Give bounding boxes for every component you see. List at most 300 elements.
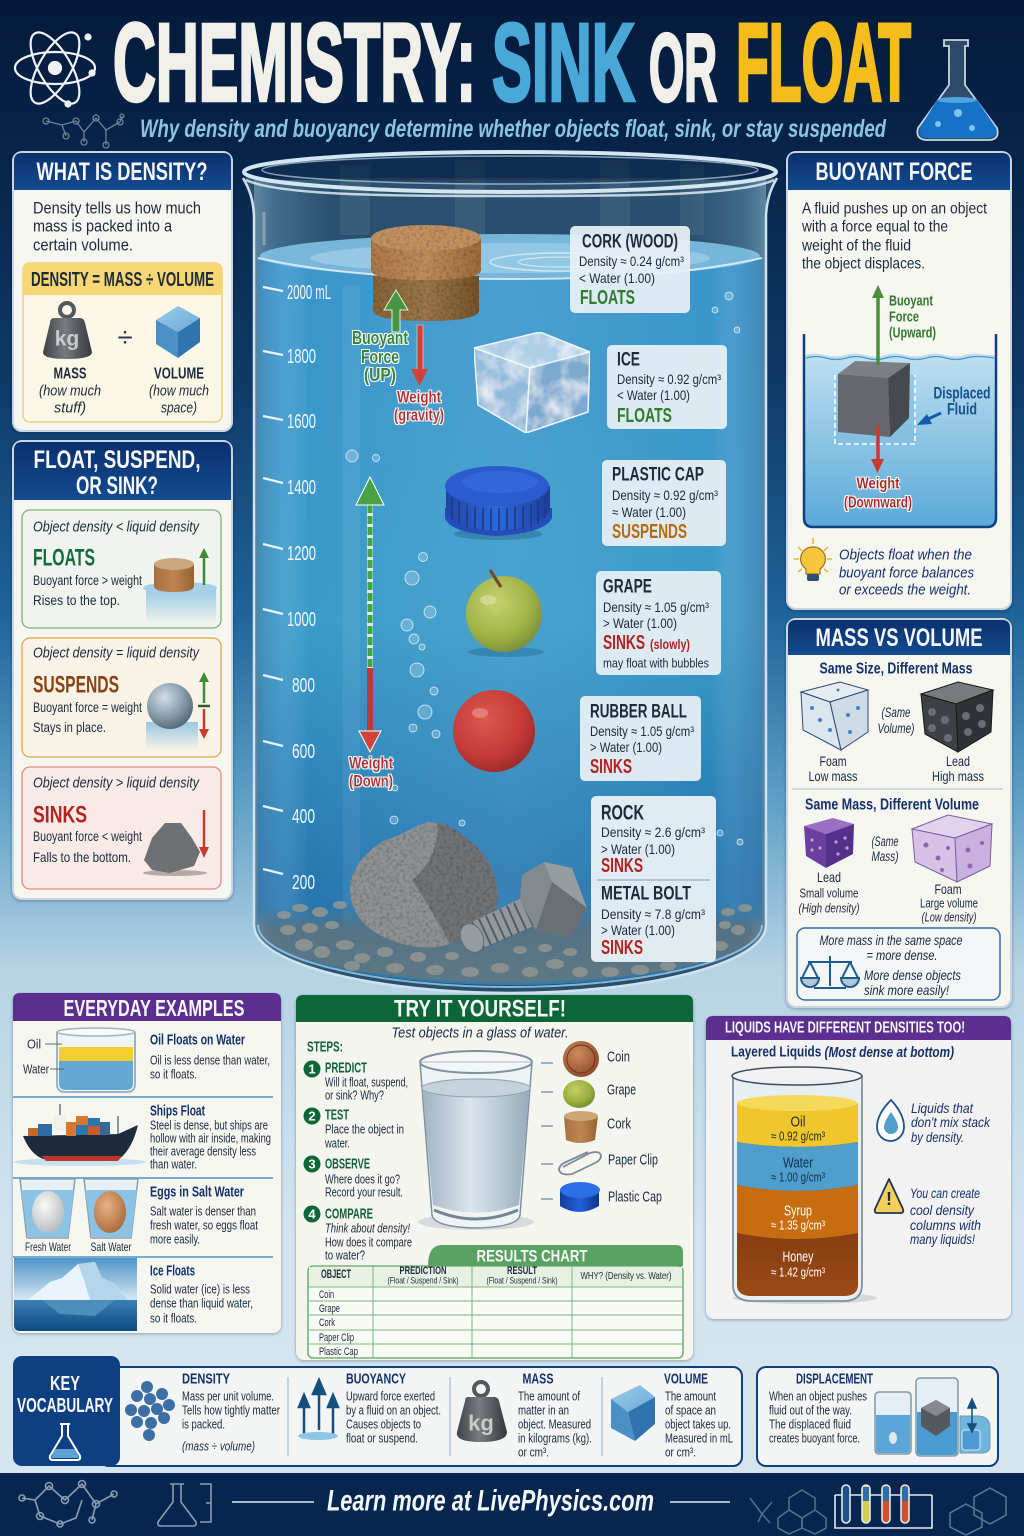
panel header — [788, 620, 1010, 655]
gravel — [258, 901, 762, 982]
tip text: Objects float when the — [839, 546, 972, 564]
vocabulary badge: KEY — [50, 1373, 80, 1395]
large foam cube — [912, 815, 992, 882]
formula box: VOLUME — [154, 366, 204, 382]
card: grape: Density ≈ 1.05 g/cm³ — [603, 599, 709, 615]
title: CHEMISTRY: — [113, 2, 476, 124]
panel header — [706, 1016, 1011, 1040]
term: volume: of space an — [665, 1402, 716, 1418]
beaker front glass — [243, 152, 777, 993]
card: plastic cap: ≈ Water (1.00) — [612, 504, 686, 520]
panel: displacement — [757, 1367, 998, 1466]
footer line left — [232, 1501, 314, 1503]
object list: Grape — [607, 1082, 636, 1098]
icon: drop — [877, 1100, 904, 1141]
panel: try it yourself: Test objects in a glass of water. — [392, 1024, 568, 1042]
step 4 — [304, 1206, 412, 1262]
term: mass — [457, 1370, 592, 1460]
object list: Coin — [607, 1048, 630, 1066]
note: liquids don't mix: Liquids that — [911, 1100, 974, 1116]
icon: kg weight: kg — [468, 1410, 494, 1436]
panel: mass vs volume: Low mass — [808, 768, 858, 784]
step 2 — [304, 1106, 404, 1150]
step 1: PREDICT — [325, 1060, 367, 1076]
example: ships float: hollow with air inside, making — [150, 1130, 271, 1146]
term: density: Mass per unit volume. — [182, 1388, 274, 1404]
note: density columns — [910, 1185, 981, 1247]
term: buoyancy: by a fluid on an object. — [346, 1402, 441, 1418]
results chart: (Float / Suspend / Sink) — [388, 1276, 458, 1286]
panel: mass vs volume — [787, 619, 1011, 1007]
icon: warning: ! — [886, 1189, 892, 1209]
panel header: WHAT IS DENSITY? — [36, 158, 208, 186]
grape — [466, 570, 544, 657]
card: sinks: SINKS — [33, 802, 87, 828]
card: grape: > Water (1.00) — [603, 615, 677, 631]
layer labels: Honey — [782, 1248, 814, 1266]
term: buoyancy: BUOYANCY — [346, 1370, 406, 1388]
example: ships float — [14, 1102, 271, 1172]
results chart: RESULT — [507, 1265, 537, 1277]
label: buoyant force up: Force — [361, 347, 399, 367]
displacement diagram — [804, 285, 996, 527]
layer labels: ≈ 1.35 g/cm³ — [771, 1218, 825, 1232]
icon: displacement beakers — [875, 1378, 990, 1456]
term: mass: or cm³. — [518, 1444, 549, 1460]
term: buoyancy: float or suspend. — [346, 1430, 418, 1446]
panel: displacement: creates buoyant force. — [769, 1430, 860, 1446]
metal bolt — [456, 862, 587, 956]
term: volume: The amount — [665, 1388, 716, 1404]
term: buoyancy: Causes objects to — [346, 1416, 421, 1432]
card: cork: CORK (WOOD) — [582, 232, 678, 252]
results chart: PREDICTION — [400, 1265, 447, 1277]
card: rock and metal bolt — [591, 796, 716, 962]
panel: displacement: fluid out of the way. — [769, 1402, 852, 1418]
example: oil on water: Oil — [27, 1036, 41, 1052]
panel: liquids have different densities: Layered Liquids (Most dense at bottom) — [731, 1044, 954, 1060]
panel: mass vs volume: Large volume — [920, 896, 978, 910]
measuring scale: 400 — [292, 806, 315, 828]
label: weight gravity — [394, 388, 444, 424]
term: density: is packed. — [182, 1416, 225, 1432]
panel header — [14, 442, 231, 500]
card: sinks: Buoyant force < weight — [33, 828, 142, 844]
ice cube — [474, 332, 590, 433]
step 4: to water? — [325, 1248, 365, 1262]
step 2: 2 — [308, 1108, 316, 1124]
arrow: displaced fluid — [917, 413, 941, 425]
intro text: mass is packed into a — [33, 216, 172, 236]
card: sinks: Object density > liquid density — [33, 774, 200, 792]
icon: particles — [125, 1381, 175, 1441]
card: cork: FLOATS — [580, 287, 635, 309]
card: cork: Density ≈ 0.24 g/cm³ — [579, 253, 684, 269]
icon: atom — [15, 25, 95, 111]
example: ships float: Steel is dense, but ships are — [150, 1118, 268, 1132]
title: OR — [649, 14, 717, 122]
arrow: buoyant force up — [384, 290, 408, 332]
layer labels: ≈ 1.42 g/cm³ — [771, 1264, 825, 1280]
term: buoyancy: Upward force exerted — [346, 1388, 435, 1404]
card: rubber ball: > Water (1.00) — [590, 739, 662, 755]
note: density columns: columns with — [910, 1217, 981, 1233]
panel header: TRY IT YOURSELF! — [394, 996, 566, 1022]
label: weight gravity: Weight — [397, 388, 441, 406]
object list: Cork — [607, 1116, 631, 1132]
arrow: buoyant — [872, 285, 884, 365]
label: weight gravity: (gravity) — [394, 406, 444, 424]
displacement diagram: Weight — [856, 476, 900, 492]
card: rubber ball: SINKS — [590, 756, 632, 778]
layer labels: ≈ 0.92 g/cm³ — [771, 1128, 825, 1144]
formula box — [23, 263, 222, 422]
icon: plastic cap — [560, 1182, 600, 1212]
step 3: 3 — [308, 1156, 316, 1172]
note: density columns: many liquids! — [910, 1231, 975, 1247]
footer band — [0, 1473, 1024, 1536]
example: ships float: their average density less — [150, 1144, 256, 1158]
results chart: OBJECT — [321, 1269, 351, 1281]
panel: mass vs volume: (Same — [882, 704, 911, 720]
formula box: stuff) — [54, 400, 86, 416]
lead cube — [921, 682, 993, 752]
results chart: Paper Clip — [319, 1332, 354, 1344]
bubbles — [346, 292, 743, 845]
tip text: buoyant force balances — [839, 564, 974, 582]
term: density — [125, 1370, 280, 1454]
label: weight down: (Down) — [349, 772, 393, 790]
panel: mass vs volume: Mass) — [872, 848, 898, 864]
formula box: (how much — [149, 382, 209, 400]
object list: Paper Clip — [608, 1152, 658, 1168]
panel: mass vs volume: (Same — [872, 833, 899, 849]
vocabulary badge — [13, 1356, 120, 1466]
card: sinks — [22, 767, 221, 889]
intro text: weight of the fluid — [801, 238, 911, 254]
measuring scale: 1600 — [287, 411, 316, 433]
layer labels: Water — [783, 1154, 813, 1172]
card: rock and metal bolt: > Water (1.00) — [601, 922, 675, 938]
icon: suspended ball — [146, 672, 210, 750]
step 1: Will it float, suspend, — [325, 1074, 408, 1090]
example: eggs in salt water: Salt water is denser than — [150, 1204, 256, 1218]
cube — [838, 361, 910, 437]
term: mass: object. Measured — [518, 1416, 591, 1432]
intro text: Density tells us how much — [33, 198, 201, 218]
card: rock and metal bolt: ROCK — [601, 802, 644, 824]
callout: more mass: More dense objects — [864, 967, 961, 983]
card: plastic cap — [602, 460, 726, 546]
layered beaker — [732, 1067, 877, 1304]
intro text — [801, 200, 987, 272]
foam cube — [801, 682, 868, 750]
icon: scales — [801, 956, 859, 988]
example: eggs in salt water: more easily. — [150, 1232, 200, 1246]
title: SINK — [492, 2, 635, 124]
step 3 — [304, 1156, 403, 1200]
panel: mass vs volume: Same Mass, Different Volume — [805, 796, 979, 814]
cork object — [371, 225, 481, 321]
vocabulary badge: VOCABULARY — [17, 1395, 113, 1417]
step 1 — [304, 1060, 408, 1102]
example: oil on water: so it floats. — [150, 1066, 197, 1082]
beaker — [243, 152, 777, 993]
panel header: OR SINK? — [76, 472, 158, 500]
results chart: RESULTS CHART — [476, 1246, 588, 1266]
card: plastic cap: SUSPENDS — [612, 521, 687, 543]
panel: mass vs volume: High mass — [932, 768, 984, 784]
icon: molecule under atom — [43, 114, 124, 148]
panel header: EVERYDAY EXAMPLES — [64, 995, 244, 1021]
term: volume: or cm³. — [665, 1444, 696, 1460]
tip text — [839, 546, 974, 598]
term: mass: MASS — [522, 1370, 554, 1388]
measuring scale — [263, 282, 331, 894]
icon: glass of water — [418, 1051, 534, 1230]
panel header — [14, 153, 231, 190]
intro text: A fluid pushes up on an object — [802, 200, 987, 218]
panel: mass vs volume: Small volume — [800, 886, 858, 900]
card: rock and metal bolt: Density ≈ 2.6 g/cm³ — [601, 824, 705, 840]
note: liquids don't mix: don't mix stack — [911, 1114, 991, 1130]
displacement diagram: (Downward) — [844, 494, 912, 512]
card: grape — [596, 571, 721, 675]
card: floats: Rises to the top. — [33, 592, 120, 608]
step 1: or sink? Why? — [325, 1088, 384, 1102]
displacement diagram: Buoyant — [889, 292, 933, 310]
results chart: Plastic Cap — [319, 1346, 358, 1358]
step 3: Where does it go? — [325, 1172, 400, 1186]
panel: try it yourself: STEPS: — [307, 1038, 343, 1056]
example: eggs in salt water — [20, 1179, 258, 1254]
panel: mass vs volume: Foam — [820, 753, 846, 769]
panel: buoyant force — [787, 152, 1011, 609]
card: suspends: SUSPENDS — [33, 672, 119, 698]
arrow: weight gravity — [411, 325, 428, 386]
icon: cork — [564, 1111, 598, 1143]
term: volume: VOLUME — [664, 1370, 708, 1388]
displacement diagram: Fluid — [947, 400, 977, 418]
step 3: OBSERVE — [325, 1156, 370, 1172]
step 1: 1 — [308, 1062, 316, 1076]
panel: mass vs volume: (High density) — [798, 900, 860, 916]
card: ice: FLOATS — [617, 405, 672, 427]
term: buoyancy — [298, 1370, 441, 1446]
icon: kg weight — [43, 303, 92, 359]
footer test tubes — [835, 1485, 932, 1528]
card: floats: Object density < liquid density — [33, 518, 200, 536]
note: liquids don't mix — [911, 1100, 991, 1145]
measuring scale: 600 — [292, 741, 315, 763]
card: grape: SINKS — [603, 632, 645, 654]
intro text: the object displaces. — [802, 256, 925, 272]
card: ice: Density ≈ 0.92 g/cm³ — [617, 371, 721, 387]
term: density: DENSITY — [182, 1370, 230, 1388]
term: volume — [611, 1370, 733, 1460]
term: density: (mass ÷ volume) — [182, 1438, 255, 1454]
example: oil on water: Oil Floats on Water — [150, 1032, 245, 1048]
card: grape: may float with bubbles — [603, 656, 709, 670]
measuring scale: 200 — [292, 872, 315, 894]
term: mass: matter in an — [518, 1402, 569, 1418]
icon: volume cube — [156, 306, 200, 358]
card: suspends: Buoyant force = weight — [33, 699, 142, 715]
term: volume: object takes up. — [665, 1416, 731, 1432]
card: rock and metal bolt: METAL BOLT — [601, 884, 691, 904]
term: density: Tells how tightly matter — [182, 1402, 280, 1418]
layer labels: Oil — [790, 1114, 806, 1130]
intro text — [33, 198, 201, 254]
layer labels: ≈ 1.00 g/cm³ — [771, 1170, 825, 1184]
step 2: water. — [324, 1136, 350, 1150]
example: ice floats: Ice Floats — [150, 1262, 195, 1280]
small lead cube — [804, 818, 854, 868]
panel: displacement: DISPLACEMENT — [796, 1370, 873, 1388]
panel: mass vs volume: Same Size, Different Mass — [820, 660, 973, 678]
icon: flask — [917, 40, 998, 140]
label: weight down — [349, 754, 393, 790]
example: ice floats: dense than liquid water, — [150, 1296, 253, 1310]
example: ice floats: Solid water (ice) is less — [150, 1282, 250, 1296]
callout: more mass: More mass in the same space — [820, 932, 963, 948]
term: volume: Measured in mL — [665, 1430, 733, 1446]
beaker back and rim — [254, 156, 766, 993]
panel: try it yourself — [296, 995, 693, 1360]
arrow: weight — [871, 425, 884, 473]
card: suspends: Object density = liquid density — [33, 644, 200, 662]
results chart: (Float / Suspend / Sink) — [486, 1276, 558, 1286]
results chart — [308, 1245, 683, 1358]
displacement diagram: (Upward) — [889, 324, 936, 342]
measuring scale: 1400 — [287, 477, 316, 499]
measuring scale: 1000 — [287, 609, 316, 631]
callout: more mass — [797, 928, 1000, 1000]
panel: float suspend or sink — [13, 441, 232, 899]
results chart: Coin — [319, 1289, 334, 1301]
icon: warning — [875, 1179, 903, 1213]
footer hexagon molecules — [750, 1490, 826, 1534]
note: density columns: cool density — [910, 1202, 975, 1218]
term: mass: The amount of — [518, 1388, 580, 1404]
callout: more mass: = more dense. — [866, 947, 938, 963]
panel: mass vs volume: Lead — [946, 753, 970, 769]
panel: what is density — [13, 152, 232, 431]
panel: mass vs volume: Volume) — [878, 720, 914, 736]
formula box: (how much — [39, 382, 101, 400]
water — [258, 234, 762, 985]
card: rubber ball — [580, 696, 701, 781]
label: buoyant force up — [352, 328, 408, 385]
card: floats — [22, 510, 221, 628]
card: cork — [570, 226, 690, 313]
displacement diagram: Displaced — [934, 384, 990, 402]
footer hexagons right — [950, 1488, 1006, 1535]
measuring scale: 1800 — [287, 346, 316, 368]
icon: grape — [563, 1080, 595, 1108]
note: liquids don't mix: by density. — [911, 1129, 964, 1145]
example: eggs in salt water: Salt Water — [90, 1240, 132, 1254]
card: suspends: Stays in place. — [33, 719, 106, 735]
card: ice: ICE — [617, 350, 640, 370]
example: oil on water: Water — [23, 1062, 49, 1076]
icon: paper clip — [559, 1152, 601, 1174]
card: sinks: Falls to the bottom. — [33, 849, 131, 865]
example: eggs in salt water: Fresh Water — [25, 1240, 71, 1254]
example: eggs in salt water: Eggs in Salt Water — [150, 1184, 244, 1200]
card: suspends — [22, 638, 221, 757]
example: eggs in salt water: fresh water, so eggs float — [150, 1218, 258, 1232]
panel: everyday examples — [13, 993, 281, 1333]
step 4: 4 — [308, 1206, 316, 1222]
card: rock and metal bolt: > Water (1.00) — [601, 841, 675, 857]
step 4: How does it compare — [325, 1234, 412, 1250]
long force arrows — [356, 477, 384, 752]
label: buoyant force up: (UP) — [364, 365, 396, 385]
measuring scale: 2000 mL — [287, 282, 331, 304]
card: ice — [607, 345, 727, 429]
panel: displacement: The displaced fluid — [769, 1416, 851, 1432]
step 4: Think about density! — [325, 1220, 410, 1236]
panel: mass vs volume: Lead — [817, 869, 841, 885]
card: rubber ball: Density ≈ 1.05 g/cm³ — [590, 723, 694, 739]
icon: kg weight: kg — [55, 328, 79, 350]
measuring scale: 800 — [292, 675, 315, 697]
step 2: TEST — [325, 1106, 349, 1124]
card: plastic cap: PLASTIC CAP — [612, 464, 704, 486]
tip text: or exceeds the weight. — [839, 582, 971, 598]
icon: sinking rock — [143, 810, 209, 876]
note: density columns: You can create — [910, 1185, 980, 1201]
intro text: with a force equal to the — [801, 218, 948, 236]
formula box: DENSITY = MASS ÷ VOLUME — [31, 269, 214, 291]
card: cork: < Water (1.00) — [579, 270, 655, 286]
footer flask icon — [158, 1484, 211, 1526]
example: oil on water — [23, 1028, 270, 1092]
rubber ball — [453, 690, 535, 772]
card: grape: GRAPE — [603, 576, 652, 598]
layer labels — [771, 1114, 825, 1280]
results chart: Cork — [319, 1317, 335, 1329]
card: plastic cap: Density ≈ 0.92 g/cm³ — [612, 487, 718, 503]
rock — [350, 822, 498, 947]
icon: cube — [611, 1385, 655, 1441]
panel: mass vs volume: Foam — [934, 881, 962, 897]
callout: more mass: sink more easily! — [864, 982, 949, 998]
step 4: COMPARE — [325, 1206, 373, 1222]
label: buoyant force up: Buoyant — [352, 328, 408, 348]
divide sign: ÷ — [117, 322, 133, 352]
example: ice floats: so it floats. — [150, 1310, 197, 1326]
object list — [541, 1041, 662, 1212]
footer text: Learn more at LivePhysics.com — [327, 1484, 654, 1518]
panel header: FLOAT, SUSPEND, — [34, 446, 200, 474]
icon: floating cork — [143, 548, 217, 624]
step 3: Record your result. — [325, 1184, 403, 1200]
icon: light bulb — [794, 538, 832, 581]
formula box: MASS — [54, 366, 87, 382]
card: rock and metal bolt: SINKS — [601, 855, 643, 877]
card: rock and metal bolt: SINKS — [601, 937, 643, 959]
card: ice: < Water (1.00) — [617, 387, 690, 403]
card: floats: Buoyant force > weight — [33, 572, 142, 588]
card: rock and metal bolt: Density ≈ 7.8 g/cm³ — [601, 906, 705, 922]
label: weight down: Weight — [349, 754, 393, 772]
panel header — [788, 153, 1010, 190]
results chart: Grape — [319, 1303, 340, 1315]
panel header — [296, 995, 693, 1022]
measuring scale: 1200 — [287, 543, 316, 565]
